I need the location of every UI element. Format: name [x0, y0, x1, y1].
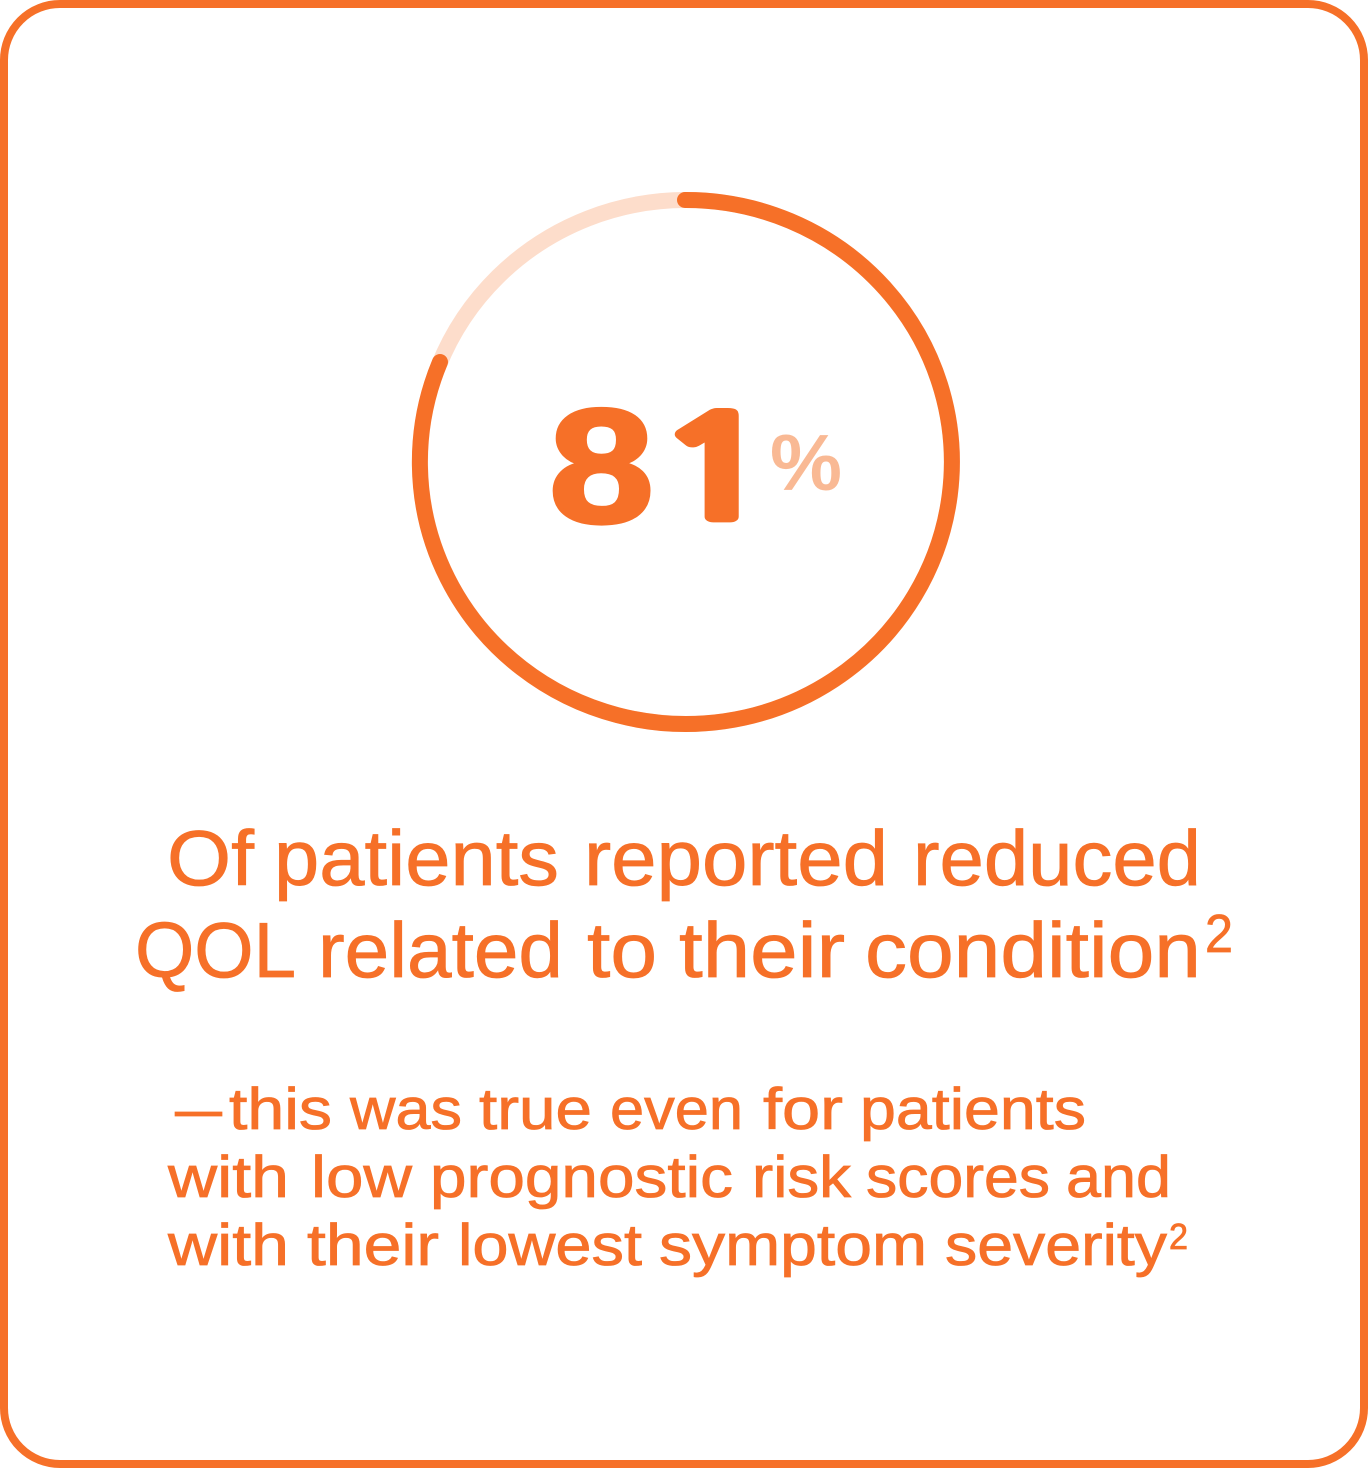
heading: QOL [135, 906, 296, 994]
supporting text: symptom [659, 1213, 927, 1278]
supporting text: even [610, 1077, 743, 1142]
heading: their [679, 906, 845, 994]
supporting text: severity [945, 1213, 1167, 1278]
heading [135, 814, 1233, 994]
heading: reduced [913, 814, 1201, 902]
supporting text: lowest [458, 1213, 642, 1278]
supporting text: with [167, 1213, 289, 1278]
supporting text: risk [752, 1145, 852, 1210]
supporting text: and [1066, 1145, 1171, 1210]
big number: 81%: 8 [549, 376, 654, 557]
heading: related [318, 906, 563, 994]
donut chart: 81 percent [420, 200, 952, 724]
supporting text: low [311, 1145, 413, 1210]
heading: to [587, 906, 657, 994]
supporting text: 2 [1169, 1216, 1188, 1257]
heading: condition [865, 906, 1201, 994]
supporting text: this [229, 1077, 332, 1142]
heading: reported [584, 814, 888, 902]
supporting text: scores [866, 1145, 1050, 1210]
big number: 81%: % [770, 418, 842, 507]
big number: 81%: 1 [654, 400, 780, 539]
supporting text: true [479, 1077, 592, 1142]
heading: Of [167, 814, 254, 902]
big number: 81% [549, 376, 842, 557]
heading: 2 [1205, 904, 1233, 964]
heading: patients [274, 814, 559, 902]
supporting text: for [763, 1077, 843, 1142]
supporting text: was [349, 1077, 462, 1142]
supporting text [167, 1077, 1188, 1278]
supporting text: — [175, 1077, 222, 1142]
supporting text: patients [860, 1077, 1086, 1142]
supporting text: prognostic [430, 1145, 733, 1210]
supporting text: their [307, 1213, 439, 1278]
supporting text: with [167, 1145, 289, 1210]
